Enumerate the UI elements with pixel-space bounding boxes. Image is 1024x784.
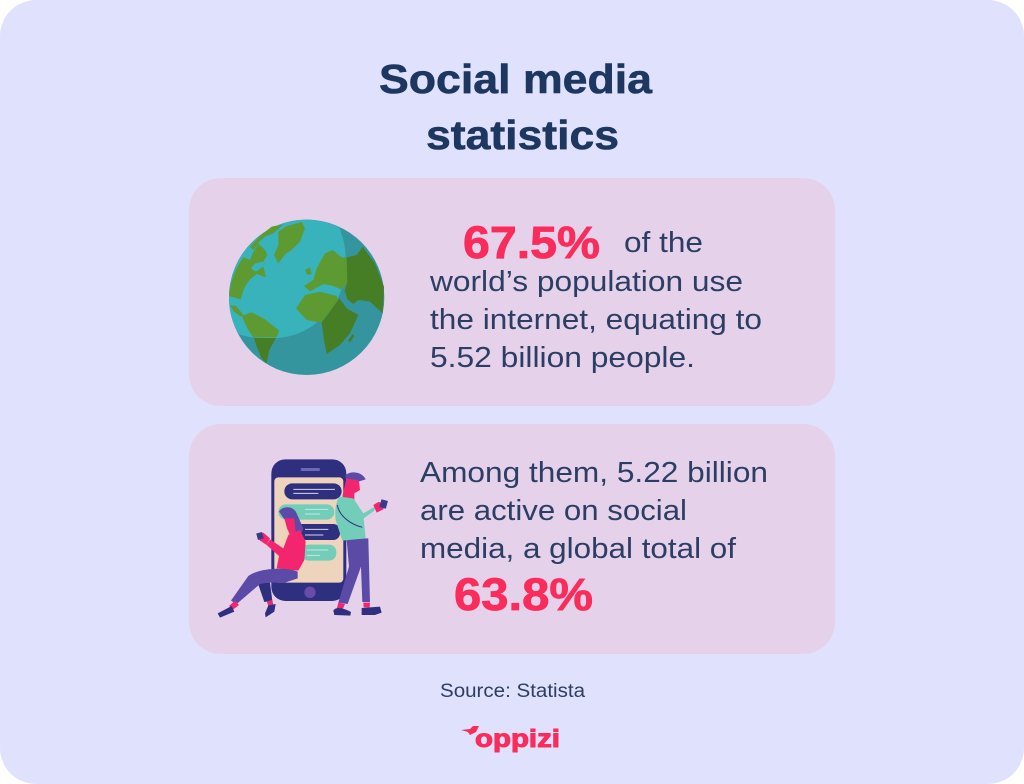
icon: people with phone — [218, 459, 388, 618]
land: Greenland — [274, 222, 305, 263]
icon: globe — [229, 220, 384, 375]
text: social media use: are active on social — [420, 495, 687, 527]
land: Arctic islands — [250, 224, 283, 250]
man standing — [333, 472, 388, 616]
phone — [271, 459, 346, 601]
text: social media use: Among them, 5.22 billion — [420, 457, 768, 489]
logo wing — [461, 726, 479, 735]
logo: oppizi: oppizi — [475, 725, 560, 753]
text: internet use: 67.5% — [463, 217, 600, 268]
source: Source: Statista — [440, 681, 585, 702]
title: statistics — [426, 112, 619, 158]
panel: internet use — [189, 178, 835, 406]
text: internet use: of the — [624, 227, 703, 259]
land: Africa light — [296, 292, 338, 323]
title — [379, 56, 653, 158]
text: social media use — [420, 457, 768, 620]
land: South America dark — [254, 338, 276, 363]
text: internet use: the internet, equating to — [430, 304, 762, 336]
text: social media use: media, a global total of — [420, 533, 737, 565]
title: Social media — [379, 56, 653, 102]
land: Europe light — [304, 250, 347, 291]
woman sitting — [218, 507, 306, 618]
land: Central America — [230, 305, 243, 317]
text: internet use: 5.52 billion people. — [430, 342, 695, 374]
land: British Isles — [305, 267, 312, 275]
land: Madagascar — [348, 334, 354, 343]
panel: social media use — [189, 424, 835, 654]
land: Africa dark — [322, 298, 358, 354]
land: North America — [229, 243, 267, 299]
land: Asia dark — [345, 247, 384, 313]
text: internet use — [429, 217, 762, 374]
text: internet use: world’s population use — [429, 266, 743, 298]
land: South America light — [242, 312, 279, 337]
text: social media use: 63.8% — [454, 569, 593, 620]
